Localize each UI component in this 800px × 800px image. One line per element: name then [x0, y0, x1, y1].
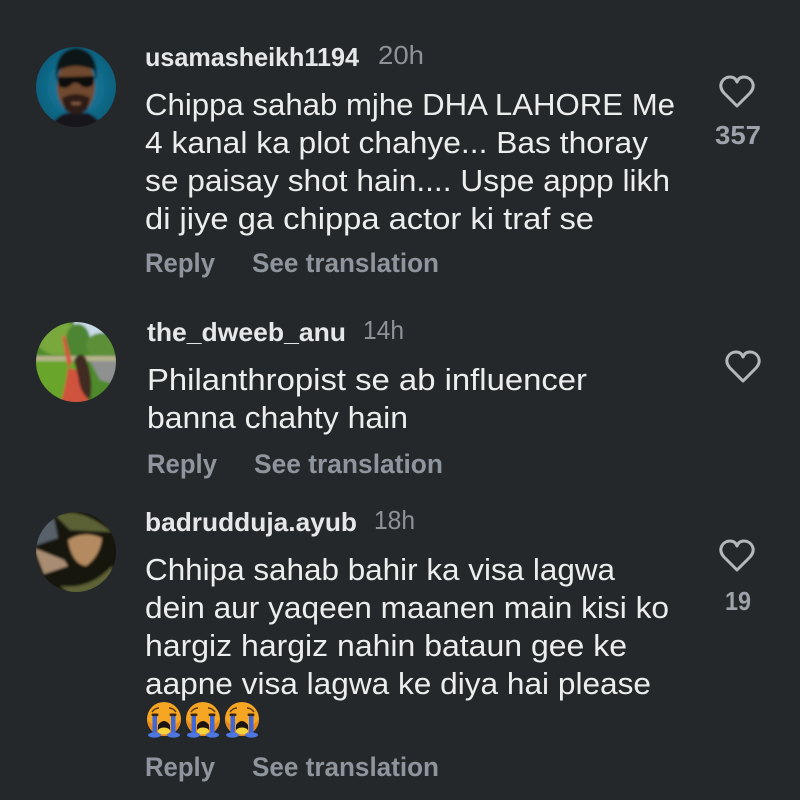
comment text — [147, 362, 587, 435]
comment text: Chippa sahab mjhe DHA LAHORE Me — [145, 87, 675, 122]
reply link: Reply — [145, 752, 215, 782]
like count: 19 — [725, 586, 751, 616]
see translation link: See translation — [252, 752, 439, 782]
comment text: 4 kanal ka plot chahye... Bas thoray — [145, 125, 648, 160]
comment text: di jiye ga chippa actor ki traf se — [145, 201, 594, 236]
comment text: Philanthropist se ab influencer — [147, 362, 587, 397]
icon: avatar dark profile photo — [36, 512, 116, 592]
icon: heart — [727, 352, 759, 381]
comment text: se paisay shot hain.... Uspe appp likh — [145, 163, 670, 198]
timestamp: 14h — [363, 315, 404, 345]
comment text: banna chahty hain — [147, 400, 408, 435]
comment text: aapne visa lagwa ke diya hai please — [145, 666, 651, 701]
reply link: Reply — [145, 248, 215, 278]
timestamp: 18h — [374, 505, 415, 535]
icon: three crying emoji — [147, 702, 259, 738]
comment text — [145, 552, 669, 701]
icon: avatar man with sunglasses — [34, 45, 118, 129]
like count: 357 — [715, 120, 761, 150]
username: badrudduja.ayub — [145, 507, 357, 537]
timestamp: 20h — [378, 40, 424, 70]
comment text: hargiz hargiz nahin bataun gee ke — [145, 628, 627, 663]
comment text: dein aur yaqeen maanen main kisi ko — [145, 590, 669, 625]
icon: heart — [721, 77, 753, 106]
panel: comment by usamasheikh1194 — [34, 40, 761, 278]
icon: avatar woman in garden — [34, 320, 118, 404]
panel: comment by badrudduja.ayub — [34, 505, 753, 782]
username: usamasheikh1194 — [145, 42, 360, 72]
see translation link: See translation — [252, 248, 439, 278]
username: the_dweeb_anu — [147, 317, 346, 347]
icon: heart — [721, 541, 753, 570]
reply link: Reply — [147, 449, 217, 479]
comment text — [145, 87, 675, 236]
panel: comment by the_dweeb_anu — [34, 315, 759, 479]
see translation link: See translation — [254, 449, 443, 479]
comment text: Chhipa sahab bahir ka visa lagwa — [145, 552, 616, 587]
